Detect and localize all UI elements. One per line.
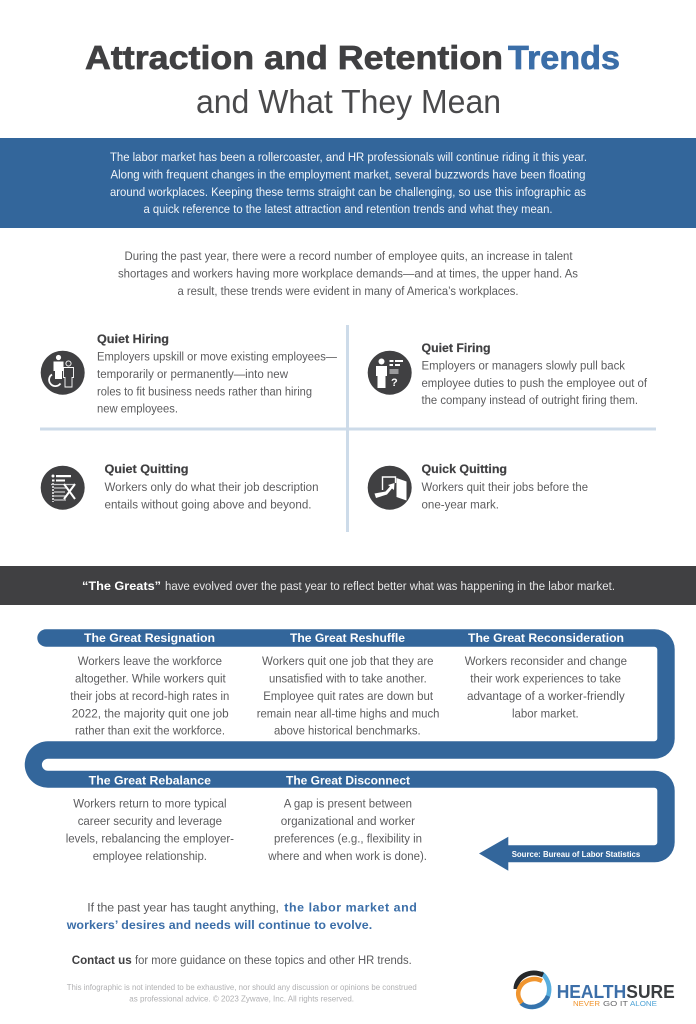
card: the great reshuffle: remain near all-time highs and much [257, 706, 439, 720]
card: the great disconnect: preferences (e.g., flexibility in [274, 832, 422, 846]
text: quiet quitting body: entails without going above and beyond. [104, 498, 312, 512]
heading: quick quitting: Quick Quitting [422, 462, 507, 476]
card: the great resignation: 2022, the majority quit one job [72, 706, 229, 720]
disclaimer [67, 982, 417, 1004]
text: quiet hiring body: temporarily or permanently—into new [97, 367, 288, 381]
logo: healthsure [516, 973, 675, 1008]
text block: closing statement: the labor market and [284, 900, 417, 914]
panel: the greats band: “The Greats” [82, 579, 161, 593]
text: quiet hiring body: Employers upskill or move existing employees— [97, 350, 338, 364]
card: the great rebalance: employee relationship. [93, 849, 207, 863]
disclaimer: as professional advice. © 2023 Zywave, Inc. All rights reserved. [129, 994, 354, 1004]
text block: context paragraph: shortages and workers having more workplace demands—and at times, the upper hand. As [118, 266, 578, 280]
card: the great reconsideration: their work experiences to take [470, 672, 621, 686]
panel: quiet trends grid [40, 325, 656, 532]
text block: context paragraph [118, 249, 578, 298]
icon: quick quitting door and arrow [368, 466, 412, 510]
heading: quiet hiring: Quiet Hiring [97, 332, 169, 346]
card: the great rebalance: levels, rebalancing the employer- [66, 832, 234, 846]
card: the great resignation: The Great Resignation [84, 631, 215, 645]
card: the great resignation: altogether. While workers quit [75, 672, 226, 686]
quadrant: quiet quitting [41, 462, 319, 512]
card: the great reshuffle: Employee quit rates are down but [263, 689, 434, 703]
logo wordmark: NEVER [573, 999, 600, 1008]
quadrant: quiet hiring [41, 332, 338, 416]
card: the great reconsideration: The Great Reconsideration [468, 631, 624, 645]
text: quick quitting body: one-year mark. [422, 498, 499, 512]
text: quick quitting body [422, 480, 588, 512]
text: quiet firing body: the company instead of outright firing them. [422, 393, 638, 407]
logo wordmark: HEALTH [557, 981, 626, 1002]
icon: quiet hiring people [41, 351, 85, 395]
ribbon arrow [25, 629, 675, 871]
heading: quiet firing: Quiet Firing [422, 341, 490, 355]
card: the great reconsideration [465, 631, 627, 720]
icon: quiet firing person and question mark: ? [391, 377, 398, 389]
panel: the greats ribbon flow [25, 629, 675, 871]
card: the great reconsideration: labor market. [512, 706, 579, 720]
card: the great resignation: their jobs at record-high rates in [70, 689, 229, 703]
icon: quiet firing person and question mark [368, 351, 412, 395]
logo wordmark: GO IT [603, 999, 629, 1008]
card: the great reshuffle: above historical benchmarks. [274, 724, 421, 738]
icon: quiet quitting crossed-out checklist [41, 466, 85, 510]
logo ring [516, 973, 549, 1007]
panel: intro banner: Along with frequent changes in the employment market, several buzzwords have been floating [110, 168, 586, 182]
logo wordmark: ALONE [630, 999, 657, 1008]
card: the great reshuffle: The Great Reshuffle [290, 631, 405, 645]
card: the great disconnect [267, 774, 427, 863]
card: the great reconsideration: advantage of a worker-friendly [467, 689, 625, 703]
card: the great reconsideration: Workers reconsider and change [465, 654, 627, 668]
text: quiet firing body: employee duties to push the employee out of [422, 376, 647, 390]
panel: the greats band: have evolved over the past year to reflect better what was happening in the labor market. [165, 579, 615, 593]
text block: context paragraph: During the past year, there were a record number of employee quits, an increase in talent [124, 249, 573, 263]
card: the great disconnect: A gap is present between [284, 796, 412, 810]
card: the great disconnect: organizational and worker [281, 814, 415, 828]
text: quiet hiring body: new employees. [97, 402, 178, 416]
text: quiet hiring body: roles to fit business needs rather than hiring [97, 384, 312, 398]
card: the great rebalance: The Great Rebalance [89, 774, 211, 788]
card: the great rebalance: Workers return to more typical [73, 796, 227, 810]
text block: closing statement: workers’ desires and needs will continue to evolve. [66, 918, 372, 932]
call to action: Contact us [72, 953, 132, 967]
card: the great reshuffle: unsatisfied with to take another. [269, 672, 427, 686]
card: the great resignation [70, 631, 229, 738]
text: quiet quitting body [104, 480, 319, 512]
logo wordmark [557, 981, 675, 1008]
card: the great reshuffle: Workers quit one job that they are [262, 654, 434, 668]
text: quiet firing body: Employers or managers slowly pull back [422, 358, 626, 372]
text: quick quitting body: Workers quit their jobs before the [422, 480, 588, 494]
panel: the greats band [0, 566, 696, 605]
panel: intro banner: around workplaces. Keeping these terms straight can be challenging, so use this infographic as [110, 185, 586, 199]
card: the great reshuffle [257, 631, 439, 738]
text: quiet firing body [422, 358, 647, 407]
panel: intro banner: a quick reference to the latest attraction and retention trends and what they mean. [144, 202, 552, 216]
title [85, 39, 620, 120]
text: quiet hiring body [97, 350, 338, 416]
disclaimer: This infographic is not intended to be exhaustive, nor should any discussion or opinions be construed [67, 982, 417, 992]
card: the great disconnect: where and when work is done). [267, 849, 427, 863]
title: and What They Mean [196, 83, 501, 120]
title: Trends [508, 39, 620, 76]
logo wordmark: SURE [626, 981, 675, 1002]
text block: closing statement [66, 900, 417, 932]
call to action: for more guidance on these topics and other HR trends. [135, 953, 412, 967]
title: Attraction and Retention [85, 39, 503, 76]
text: quiet quitting body: Workers only do what their job description [104, 480, 319, 494]
text block: context paragraph: a result, these trends were evident in many of America’s workplaces. [178, 284, 518, 298]
panel: intro banner: The labor market has been a rollercoaster, and HR professionals will continue riding it this year. [110, 150, 587, 164]
card: the great rebalance: career security and leverage [78, 814, 222, 828]
card: the great resignation: Workers leave the workforce [78, 654, 222, 668]
heading: quiet quitting: Quiet Quitting [104, 462, 188, 476]
quadrant: quick quitting [368, 462, 588, 512]
quadrant: quiet firing [368, 341, 647, 407]
card: the great rebalance [66, 774, 234, 863]
text block: closing statement: If the past year has taught anything, [87, 900, 279, 914]
card: the great resignation: rather than exit the workforce. [75, 724, 225, 738]
source note: Source: Bureau of Labor Statistics [512, 850, 641, 859]
card: the great disconnect: The Great Disconnect [286, 774, 410, 788]
panel: intro banner [0, 138, 696, 228]
